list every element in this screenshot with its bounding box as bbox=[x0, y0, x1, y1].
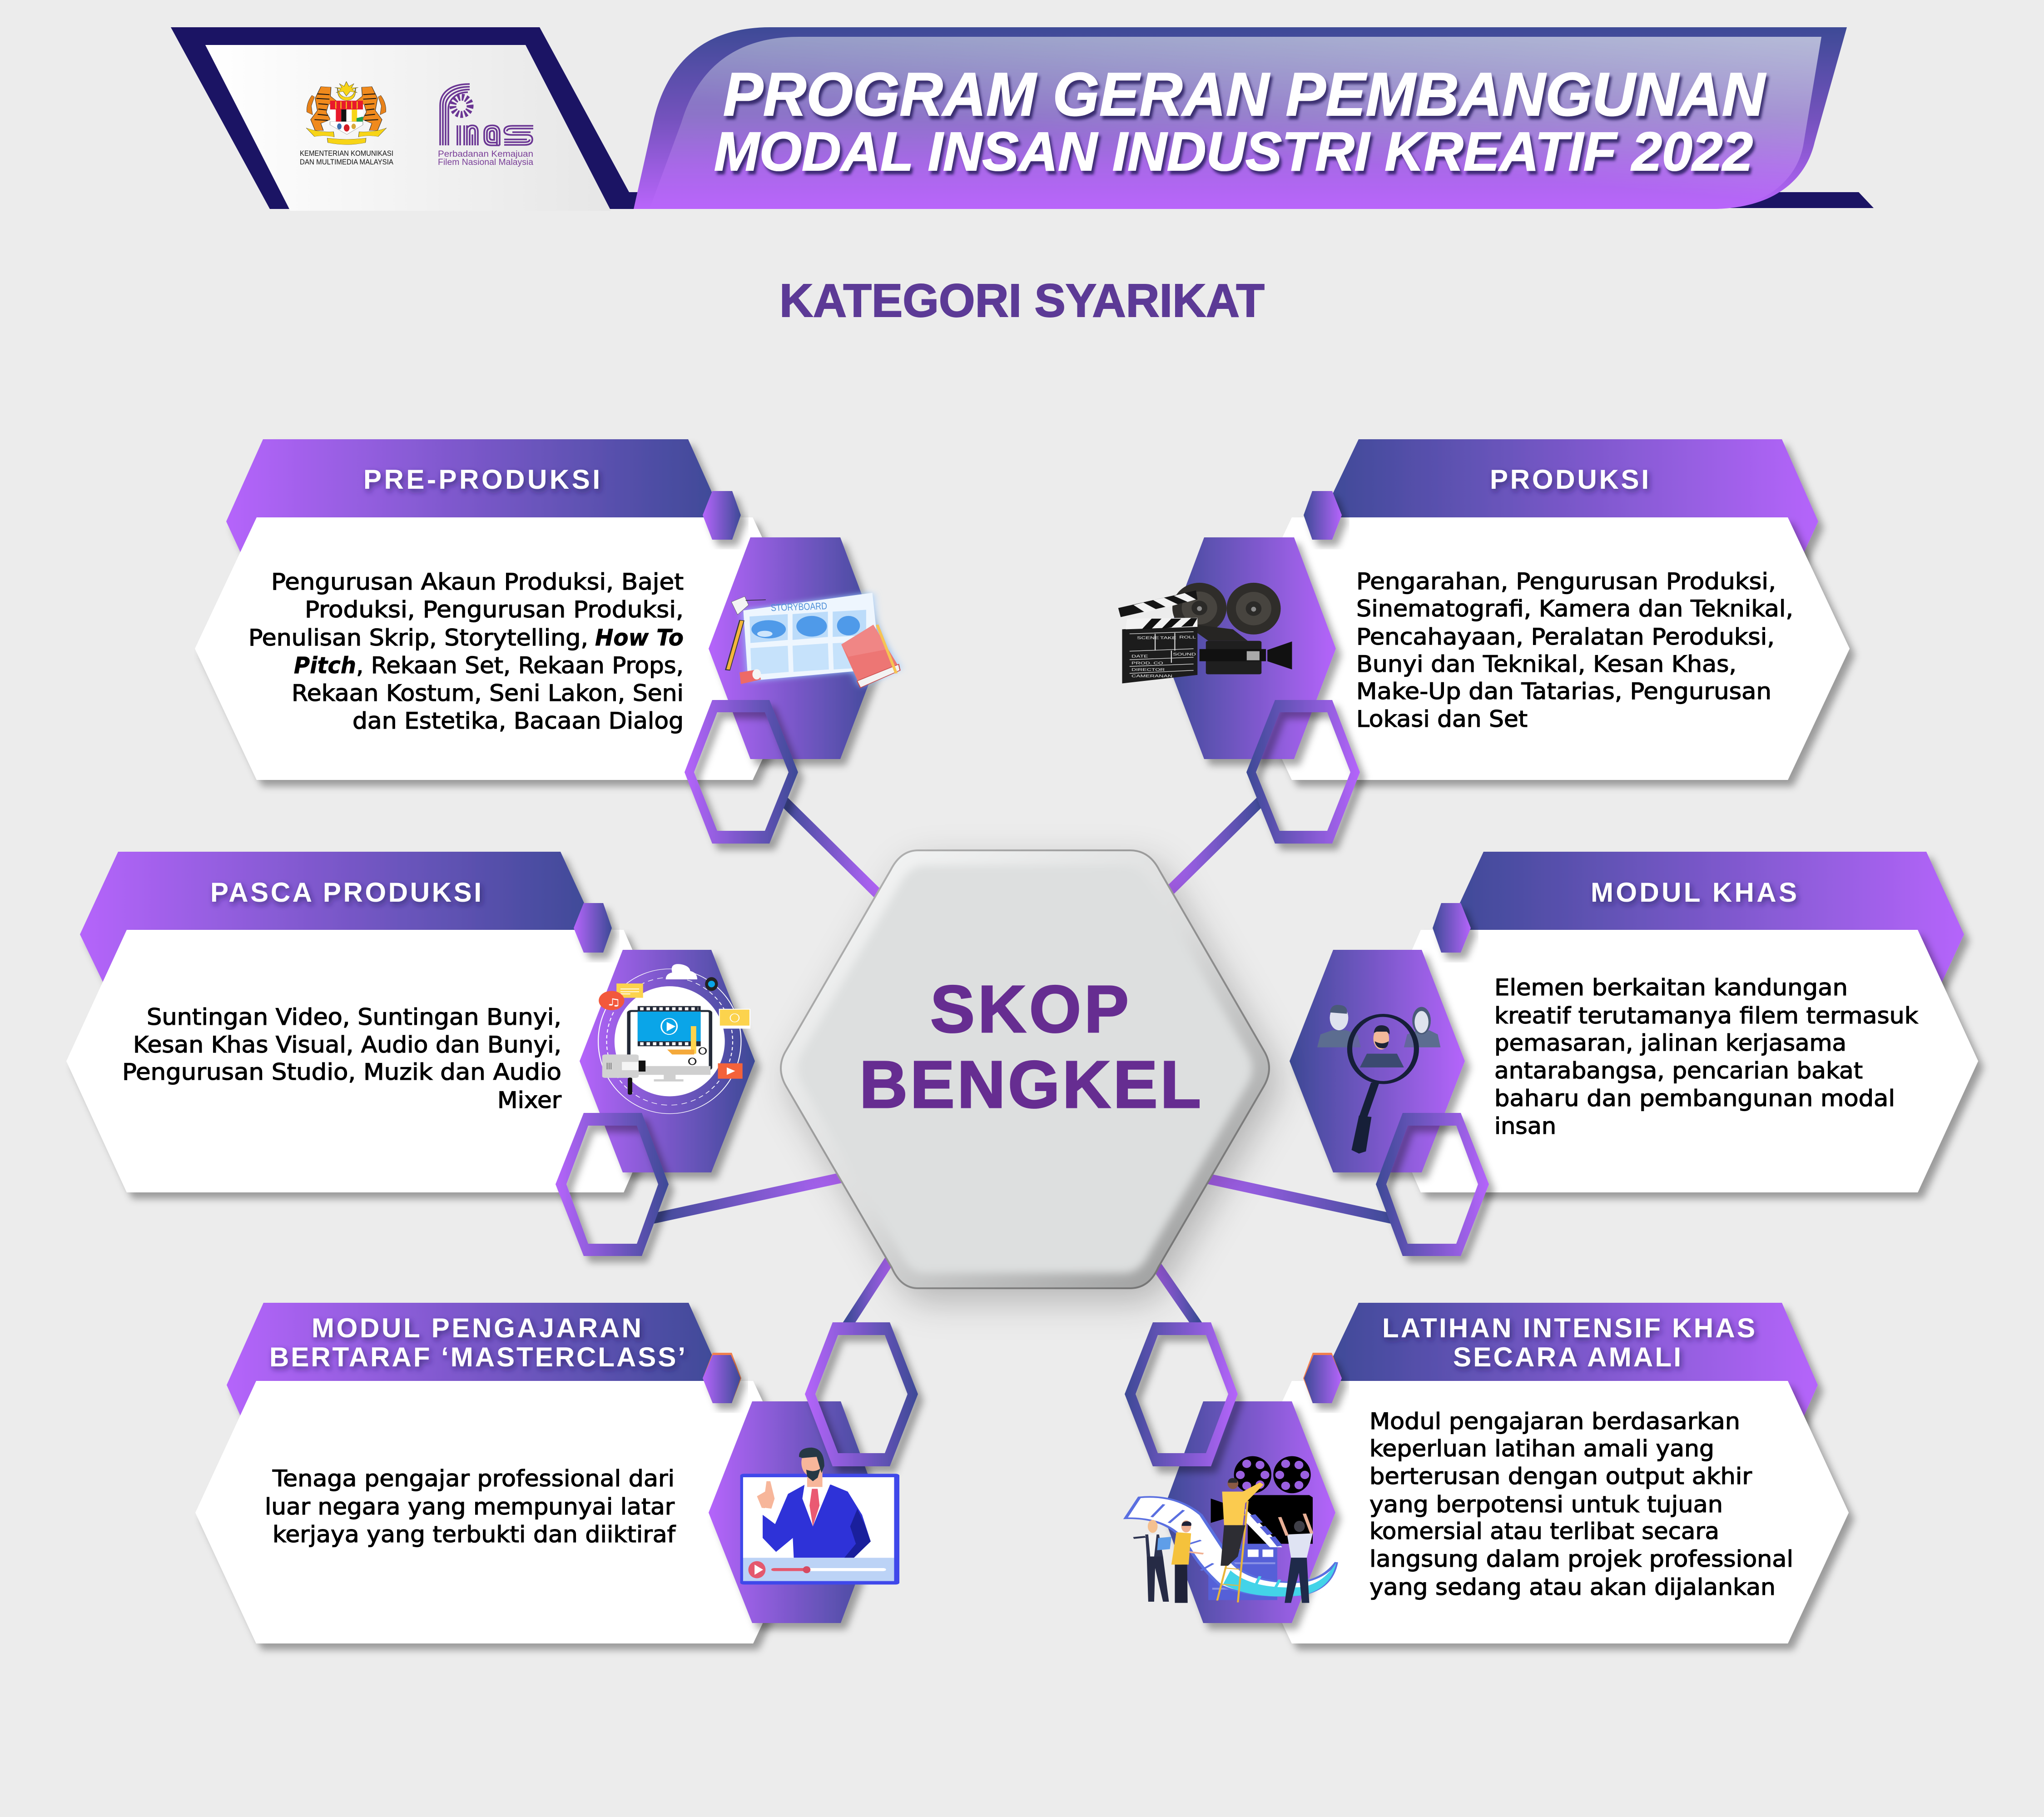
title text: MODAL INSAN INDUSTRI KREATIF 2022 bbox=[714, 120, 1753, 182]
connector lines bbox=[652, 799, 1393, 1326]
body text: berterusan dengan output akhir bbox=[1369, 1463, 1752, 1489]
body text: Suntingan Video, Suntingan Bunyi, bbox=[147, 1004, 561, 1030]
centre title: BENGKEL bbox=[859, 1048, 1201, 1122]
body text: Penulisan Skrip, Storytelling, bbox=[248, 625, 588, 651]
body text: Pengurusan Studio, Muzik dan Audio bbox=[122, 1059, 561, 1085]
panel: pre-produksi bbox=[195, 439, 900, 844]
icon: talent magnifier bbox=[1317, 1005, 1440, 1154]
title text: PROGRAM GERAN PEMBANGUNAN bbox=[723, 60, 1766, 129]
body text: Modul pengajaran berdasarkan bbox=[1369, 1408, 1740, 1435]
panel: pasca produksi bbox=[66, 852, 755, 1256]
heading: SECARA AMALI bbox=[1453, 1342, 1681, 1372]
icon: film camera and clapperboard: SCENE bbox=[1137, 635, 1159, 640]
body text: kreatif terutamanya filem termasuk bbox=[1494, 1003, 1918, 1029]
body text: Bunyi dan Teknikal, Kesan Khas, bbox=[1356, 651, 1736, 677]
body text: insan bbox=[1494, 1113, 1556, 1139]
centre title bbox=[859, 972, 1201, 1122]
outline hexagon bbox=[805, 1322, 918, 1466]
body text: yang sedang atau akan dijalankan bbox=[1369, 1574, 1776, 1600]
body text: pemasaran, jalinan kerjasama bbox=[1494, 1030, 1846, 1056]
icon: film crew bbox=[1126, 1456, 1336, 1603]
panel: produksi bbox=[1118, 439, 1850, 844]
heading: PRODUKSI bbox=[1490, 464, 1649, 495]
logo caption: ministry: DAN MULTIMEDIA MALAYSIA bbox=[300, 158, 394, 166]
header banner bbox=[171, 27, 1874, 211]
heading: MODUL PENGAJARAN bbox=[312, 1313, 641, 1343]
body text: Pengarahan, Pengurusan Produksi, bbox=[1356, 568, 1776, 595]
icon: film camera and clapperboard: ROLL bbox=[1179, 635, 1196, 640]
centre hexagon: skop bengkel bbox=[781, 850, 1278, 1301]
body text: Pitch bbox=[294, 652, 356, 679]
logo caption: ministry: KEMENTERIAN KOMUNIKASI bbox=[300, 149, 393, 158]
logo caption: ministry bbox=[300, 149, 394, 166]
body text: luar negara yang mempunyai latar bbox=[265, 1494, 675, 1520]
icon: film camera and clapperboard: SOUND bbox=[1173, 652, 1196, 656]
body text: Pengurusan Akaun Produksi, Bajet bbox=[271, 569, 684, 595]
logo plate bbox=[171, 27, 654, 211]
outline hexagon bbox=[1246, 700, 1360, 844]
centre title: SKOP bbox=[930, 972, 1129, 1047]
icon: video editing: ♫ bbox=[605, 997, 621, 1008]
body text: Elemen berkaitan kandungan bbox=[1494, 974, 1848, 1001]
body text bbox=[248, 569, 684, 734]
icon: storyboard: STORYBOARD bbox=[770, 600, 828, 613]
body text: kerjaya yang terbukti dan diiktiraf bbox=[273, 1521, 676, 1548]
body text: komersial atau terlibat secara bbox=[1369, 1518, 1719, 1544]
panel: modul pengajaran masterclass bbox=[195, 1303, 918, 1643]
logo caption: FINAS: Filem Nasional Malaysia bbox=[438, 158, 533, 167]
panel: latihan intensif khas bbox=[1125, 1303, 1849, 1643]
body text: Produksi, Pengurusan Produksi, bbox=[305, 596, 684, 623]
heading: BERTARAF ‘MASTERCLASS’ bbox=[269, 1342, 685, 1372]
heading bbox=[269, 1313, 685, 1372]
outline hexagon bbox=[1125, 1322, 1238, 1466]
body text: keperluan latihan amali yang bbox=[1369, 1435, 1714, 1462]
logo caption: FINAS bbox=[438, 149, 533, 167]
body text: Make-Up dan Tatarias, Pengurusan bbox=[1356, 678, 1771, 705]
icon: film camera and clapperboard: CAMERANAN bbox=[1131, 674, 1172, 678]
body text: Sinematografi, Kamera dan Teknikal, bbox=[1356, 596, 1793, 622]
heading: PRE-PRODUKSI bbox=[363, 464, 600, 495]
body text bbox=[265, 1465, 676, 1548]
icon: storyboard bbox=[728, 593, 900, 688]
icon: film camera and clapperboard: DIRECTOR bbox=[1131, 668, 1165, 672]
body text: Rekaan Kostum, Seni Lakon, Seni bbox=[292, 680, 684, 706]
body text: Kesan Khas Visual, Audio dan Bunyi, bbox=[133, 1032, 561, 1058]
icon: video editing bbox=[598, 964, 750, 1114]
icon: film camera and clapperboard: PROD. CO bbox=[1131, 661, 1163, 665]
subtitle: kategori syarikat: KATEGORI SYARIKAT bbox=[779, 274, 1265, 327]
icon: film camera and clapperboard: DATE bbox=[1131, 654, 1148, 659]
body text: Lokasi dan Set bbox=[1356, 706, 1528, 732]
body text bbox=[1494, 974, 1918, 1139]
body text: yang berpotensi untuk tujuan bbox=[1369, 1491, 1723, 1518]
title plate bbox=[634, 27, 1847, 209]
heading: LATIHAN INTENSIF KHAS bbox=[1382, 1313, 1755, 1343]
body text: Tenaga pengajar professional dari bbox=[272, 1465, 675, 1492]
body text: Pencahayaan, Peralatan Peroduksi, bbox=[1356, 624, 1775, 650]
body text bbox=[122, 1004, 561, 1113]
body text: How To bbox=[595, 625, 684, 651]
logo: Malaysian coat of arms bbox=[306, 81, 387, 144]
icon: online instructor bbox=[740, 1448, 899, 1584]
heading: MODUL KHAS bbox=[1591, 877, 1797, 908]
heading bbox=[1382, 1313, 1755, 1372]
body text: baharu dan pembangunan modal bbox=[1494, 1085, 1895, 1112]
body text: , Rekaan Set, Rekaan Props, bbox=[356, 652, 684, 679]
panel: modul khas bbox=[1290, 852, 1978, 1256]
icon: film camera and clapperboard: TAKE bbox=[1160, 635, 1176, 640]
logo: FINAS bbox=[440, 84, 533, 145]
outline hexagon bbox=[685, 700, 798, 844]
logo caption: FINAS: Perbadanan Kemajuan bbox=[438, 149, 533, 159]
body text: antarabangsa, pencarian bakat bbox=[1494, 1057, 1863, 1084]
title text bbox=[714, 60, 1766, 182]
body text: langsung dalam projek professional bbox=[1369, 1546, 1793, 1572]
outline hexagon bbox=[1376, 1113, 1489, 1256]
icon: film camera and clapperboard bbox=[1118, 583, 1292, 684]
body text bbox=[1369, 1408, 1793, 1600]
body text bbox=[1356, 568, 1793, 732]
outline hexagon bbox=[556, 1113, 669, 1256]
body text: dan Estetika, Bacaan Dialog bbox=[352, 708, 684, 734]
body text: Mixer bbox=[497, 1087, 561, 1113]
heading: PASCA PRODUKSI bbox=[210, 877, 481, 908]
